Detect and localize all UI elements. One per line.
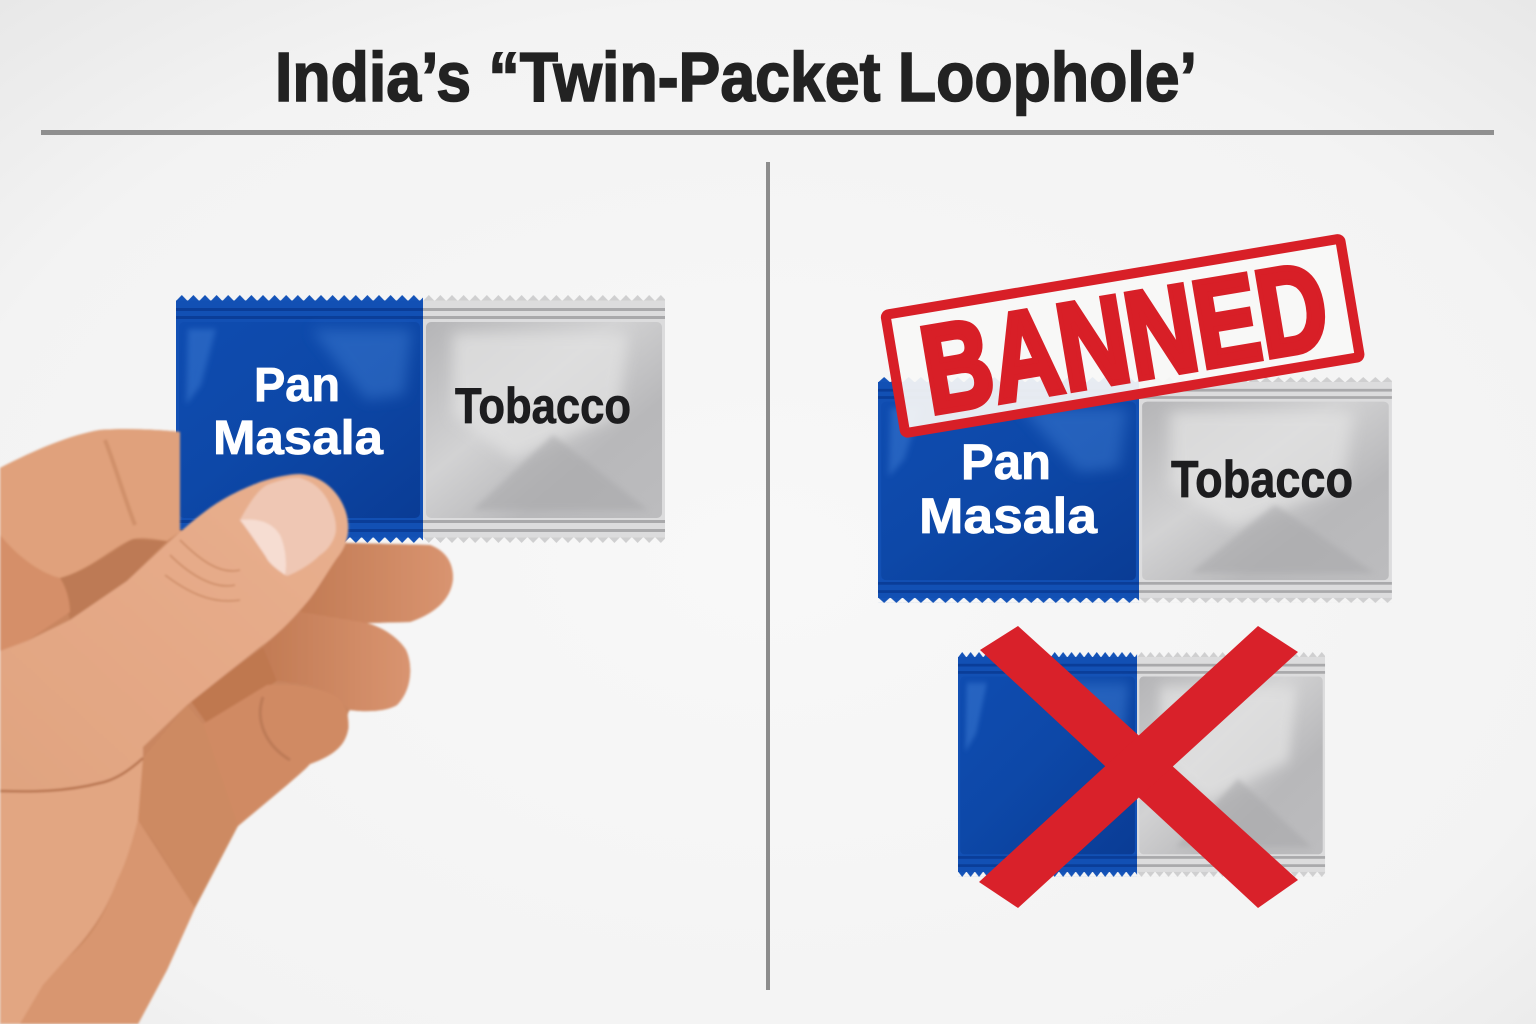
label: pan masala [213, 359, 383, 465]
panel: twin packet held in hand [0, 295, 665, 1024]
hand silhouette base [0, 429, 453, 1024]
panel divider [766, 162, 770, 990]
label: tobacco: Tobacco [455, 378, 631, 434]
title: India’s “Twin-Packet Loophole’ [275, 38, 1197, 116]
panel: banned twin packet [878, 233, 1392, 908]
gap between fingers [190, 647, 277, 724]
stamp: banned: BANNED [912, 237, 1337, 440]
finger shadow behind thumb [60, 539, 167, 620]
middle finger [300, 543, 453, 623]
wrist [20, 820, 195, 1024]
label: tobacco: Tobacco [1171, 451, 1353, 509]
thumb [0, 474, 348, 791]
label: pan masala: Pan [961, 434, 1051, 490]
title divider [41, 130, 1494, 135]
outer finger [0, 535, 70, 651]
palm lower segment [138, 705, 238, 908]
twin packet: banned [878, 377, 1392, 603]
crossed-out twin packet [958, 626, 1325, 908]
icon: red cross [979, 626, 1298, 908]
little finger [203, 684, 348, 826]
label: pan masala: Pan [254, 359, 340, 412]
index finger [0, 429, 180, 578]
palm thenar [0, 758, 143, 1024]
label: pan masala [919, 434, 1098, 544]
ring finger [263, 612, 410, 711]
label: pan masala: Masala [919, 488, 1098, 544]
label: pan masala: Masala [213, 412, 383, 465]
twin packet: held [176, 295, 665, 543]
thumbnail [240, 478, 336, 576]
icon: hand holding packet [0, 429, 453, 1024]
